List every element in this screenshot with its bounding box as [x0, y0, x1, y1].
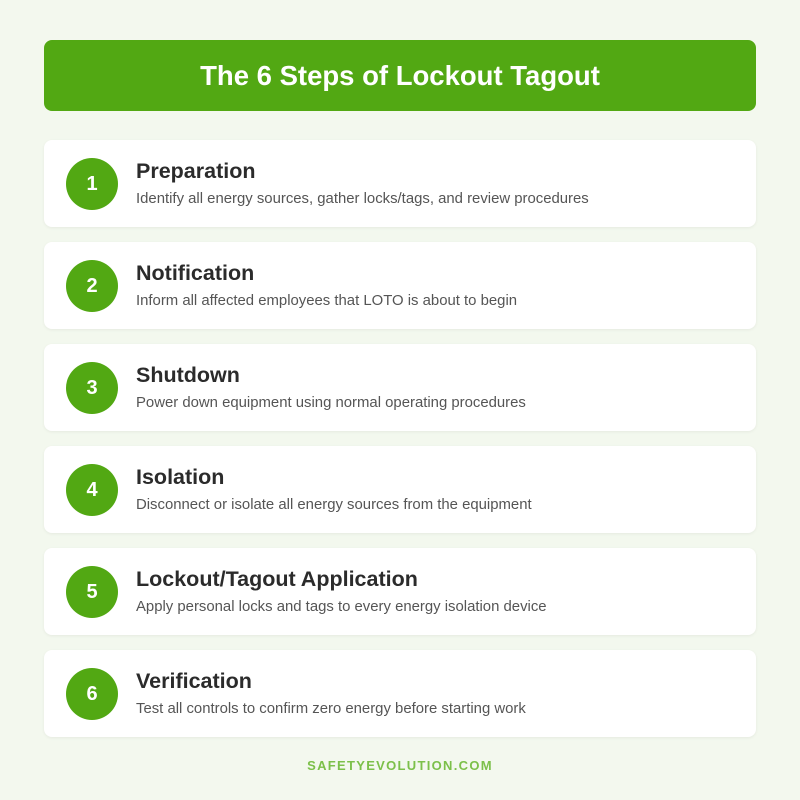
card: step 5: [44, 548, 756, 635]
title: The 6 Steps of Lockout Tagout: [200, 60, 600, 91]
card: step 3: Power down equipment using normal operating procedures: [136, 395, 526, 411]
card: step 1: Identify all energy sources, gather locks/tags, and review procedures: [136, 191, 589, 207]
card: step 1: [44, 140, 756, 227]
card: step 5: 5: [86, 581, 98, 603]
card: step 3: 3: [86, 377, 98, 399]
card: step 2: 2: [86, 275, 98, 297]
card: step 6: Test all controls to confirm zero energy before starting work: [136, 701, 526, 717]
card: step 4: 4: [86, 479, 98, 501]
card: step 2: Notification: [136, 261, 254, 285]
card: step 3: Shutdown: [136, 363, 240, 387]
title: [44, 40, 756, 111]
card: step 4: Isolation: [136, 465, 224, 489]
card: step 5: Apply personal locks and tags to every energy isolation device: [136, 599, 547, 615]
card: step 6: Verification: [136, 669, 252, 693]
card: step 5: Lockout/Tagout Application: [136, 567, 418, 591]
footer: SAFETYEVOLUTION.COM: [307, 758, 493, 773]
card: step 6: [44, 650, 756, 737]
card: step 2: Inform all affected employees that LOTO is about to begin: [136, 293, 517, 309]
card: step 1: 1: [86, 173, 98, 195]
card: step 2: [44, 242, 756, 329]
card: step 6: 6: [86, 683, 98, 705]
card: step 1: Preparation: [136, 159, 255, 183]
card: step 4: Disconnect or isolate all energy sources from the equipment: [136, 497, 532, 513]
card: step 3: [44, 344, 756, 431]
card: step 4: [44, 446, 756, 533]
